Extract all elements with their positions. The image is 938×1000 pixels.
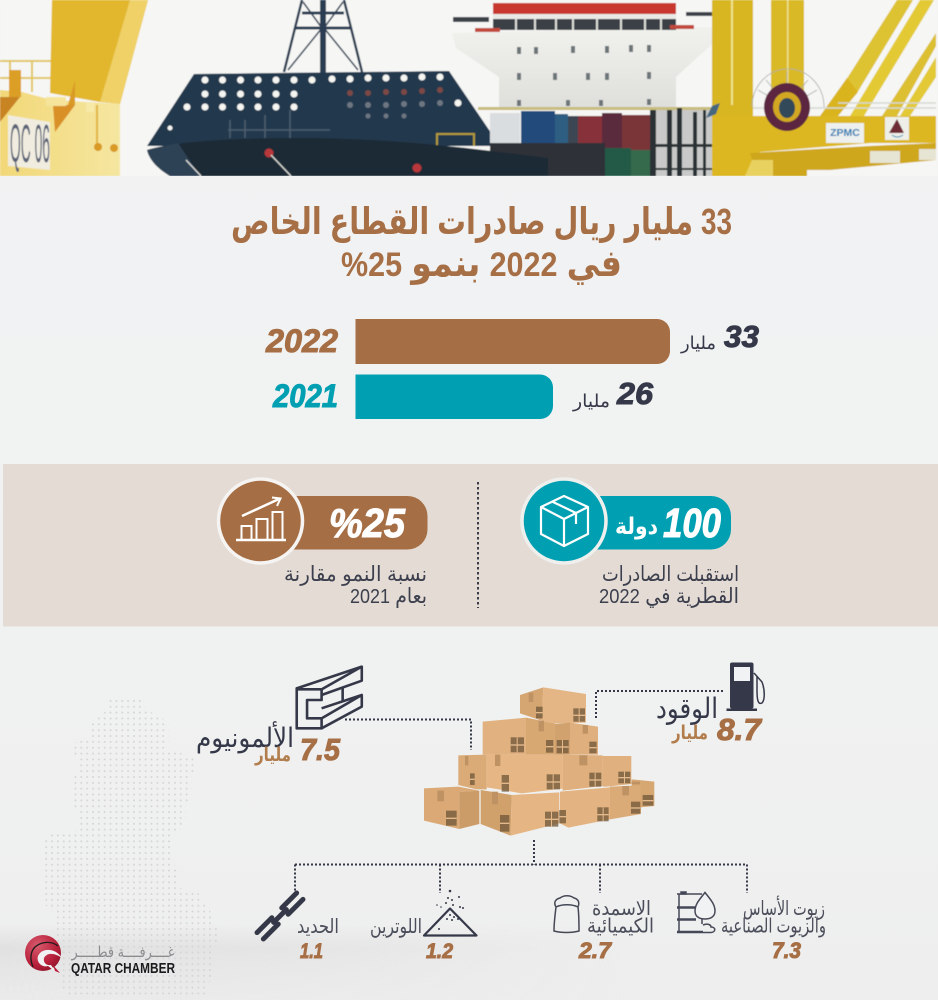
title [231,201,732,285]
ship white bridge tower [452,3,712,110]
ship mast [282,0,364,74]
category: aluminium: 7.5 [300,732,341,767]
category: fertilizers: الكيميائية [587,916,654,938]
icon: chain [257,893,303,939]
bar 2021 [272,374,654,419]
stack of cardboard boxes [424,687,654,836]
icon: oil barrel and drop [677,892,715,932]
bar 2021: 26 [616,376,654,411]
category: fertilizers: 2.7 [578,938,613,963]
stat: destination countries: القطرية في 2022 [599,585,739,608]
connector lines [295,691,747,893]
category: fertilizers: الاسمدة [592,898,651,920]
stat: destination countries [522,479,739,608]
stat: growth rate: %25 [329,500,406,546]
category: fuel: 8.7 [717,712,763,747]
category: iron [257,893,339,963]
title: في 2022 بنمو 25% [341,243,622,285]
bar 2021: مليار [572,391,610,411]
category: fuel: مليار [671,723,708,744]
category: base and industrial oils: والزيوت الصناعية [721,916,826,938]
icon: aluminium profile [297,667,362,728]
category: lutrine [370,890,476,963]
bar 2021: 2021 [272,378,338,414]
category: aluminium: مليار [254,745,291,766]
bar 2022: 2022 [265,323,338,359]
logo: Qatar Chamber: QATAR CHAMBER [71,961,175,977]
bar 2022 [265,319,759,364]
category: lutrine: 1.2 [426,940,453,963]
stat: growth rate: نسبة النمو مقارنة [284,563,427,586]
icon: parcel [522,479,606,563]
stat: destination countries: دولة [615,513,658,540]
title: 33 مليار ريال صادرات القطاع الخاص [231,201,732,243]
category: iron: 1.1 [300,940,323,963]
photo: container ship and port cranes [0,0,938,176]
icon: chamber emblem [25,935,62,973]
QC 06 plate [8,114,50,174]
stat: growth rate: بعام 2021 [350,585,427,608]
category: aluminium: الألمونيوم [196,720,294,754]
logo: Qatar Chamber: غــــرفــــة قطـــــر [71,944,175,961]
left crane boom [0,0,148,176]
category: base and industrial oils: 7.3 [772,938,801,963]
stat: destination countries: استقبلت الصادرات [602,563,739,586]
ship bow superstructure [147,71,500,146]
background fog texture [0,938,366,978]
category: aluminium [196,667,362,767]
icon: sack [554,896,579,932]
stat: destination countries: 100 [663,500,721,546]
icon: growth chart [218,479,302,563]
category: fuel [656,662,764,747]
category: fuel: الوقود [656,693,718,725]
category: fertilizers [554,896,654,963]
photo: container ship and port cranes: QC 06 [10,114,50,174]
dotted map of Qatar [43,698,220,998]
icon: fuel pump [726,662,764,711]
deck containers [478,107,712,176]
panel: key figures band [3,464,938,626]
category: lutrine: اللوترين [370,916,422,938]
category: base and industrial oils [677,892,826,963]
bar 2022: مليار [680,333,716,353]
category: base and industrial oils: زيوت الأساس [743,896,825,920]
stat: growth rate [218,479,428,608]
logo: Qatar Chamber [25,935,175,977]
bar chart: exports 2021-2022 [265,319,759,419]
right crane: ZPMC [830,127,860,139]
bar 2022: 33 [724,319,759,354]
left crane railings [0,60,52,92]
ship hull [147,138,548,176]
right crane [706,0,936,176]
icon: powder pile [424,890,476,936]
category: iron: الحديد [297,916,339,938]
